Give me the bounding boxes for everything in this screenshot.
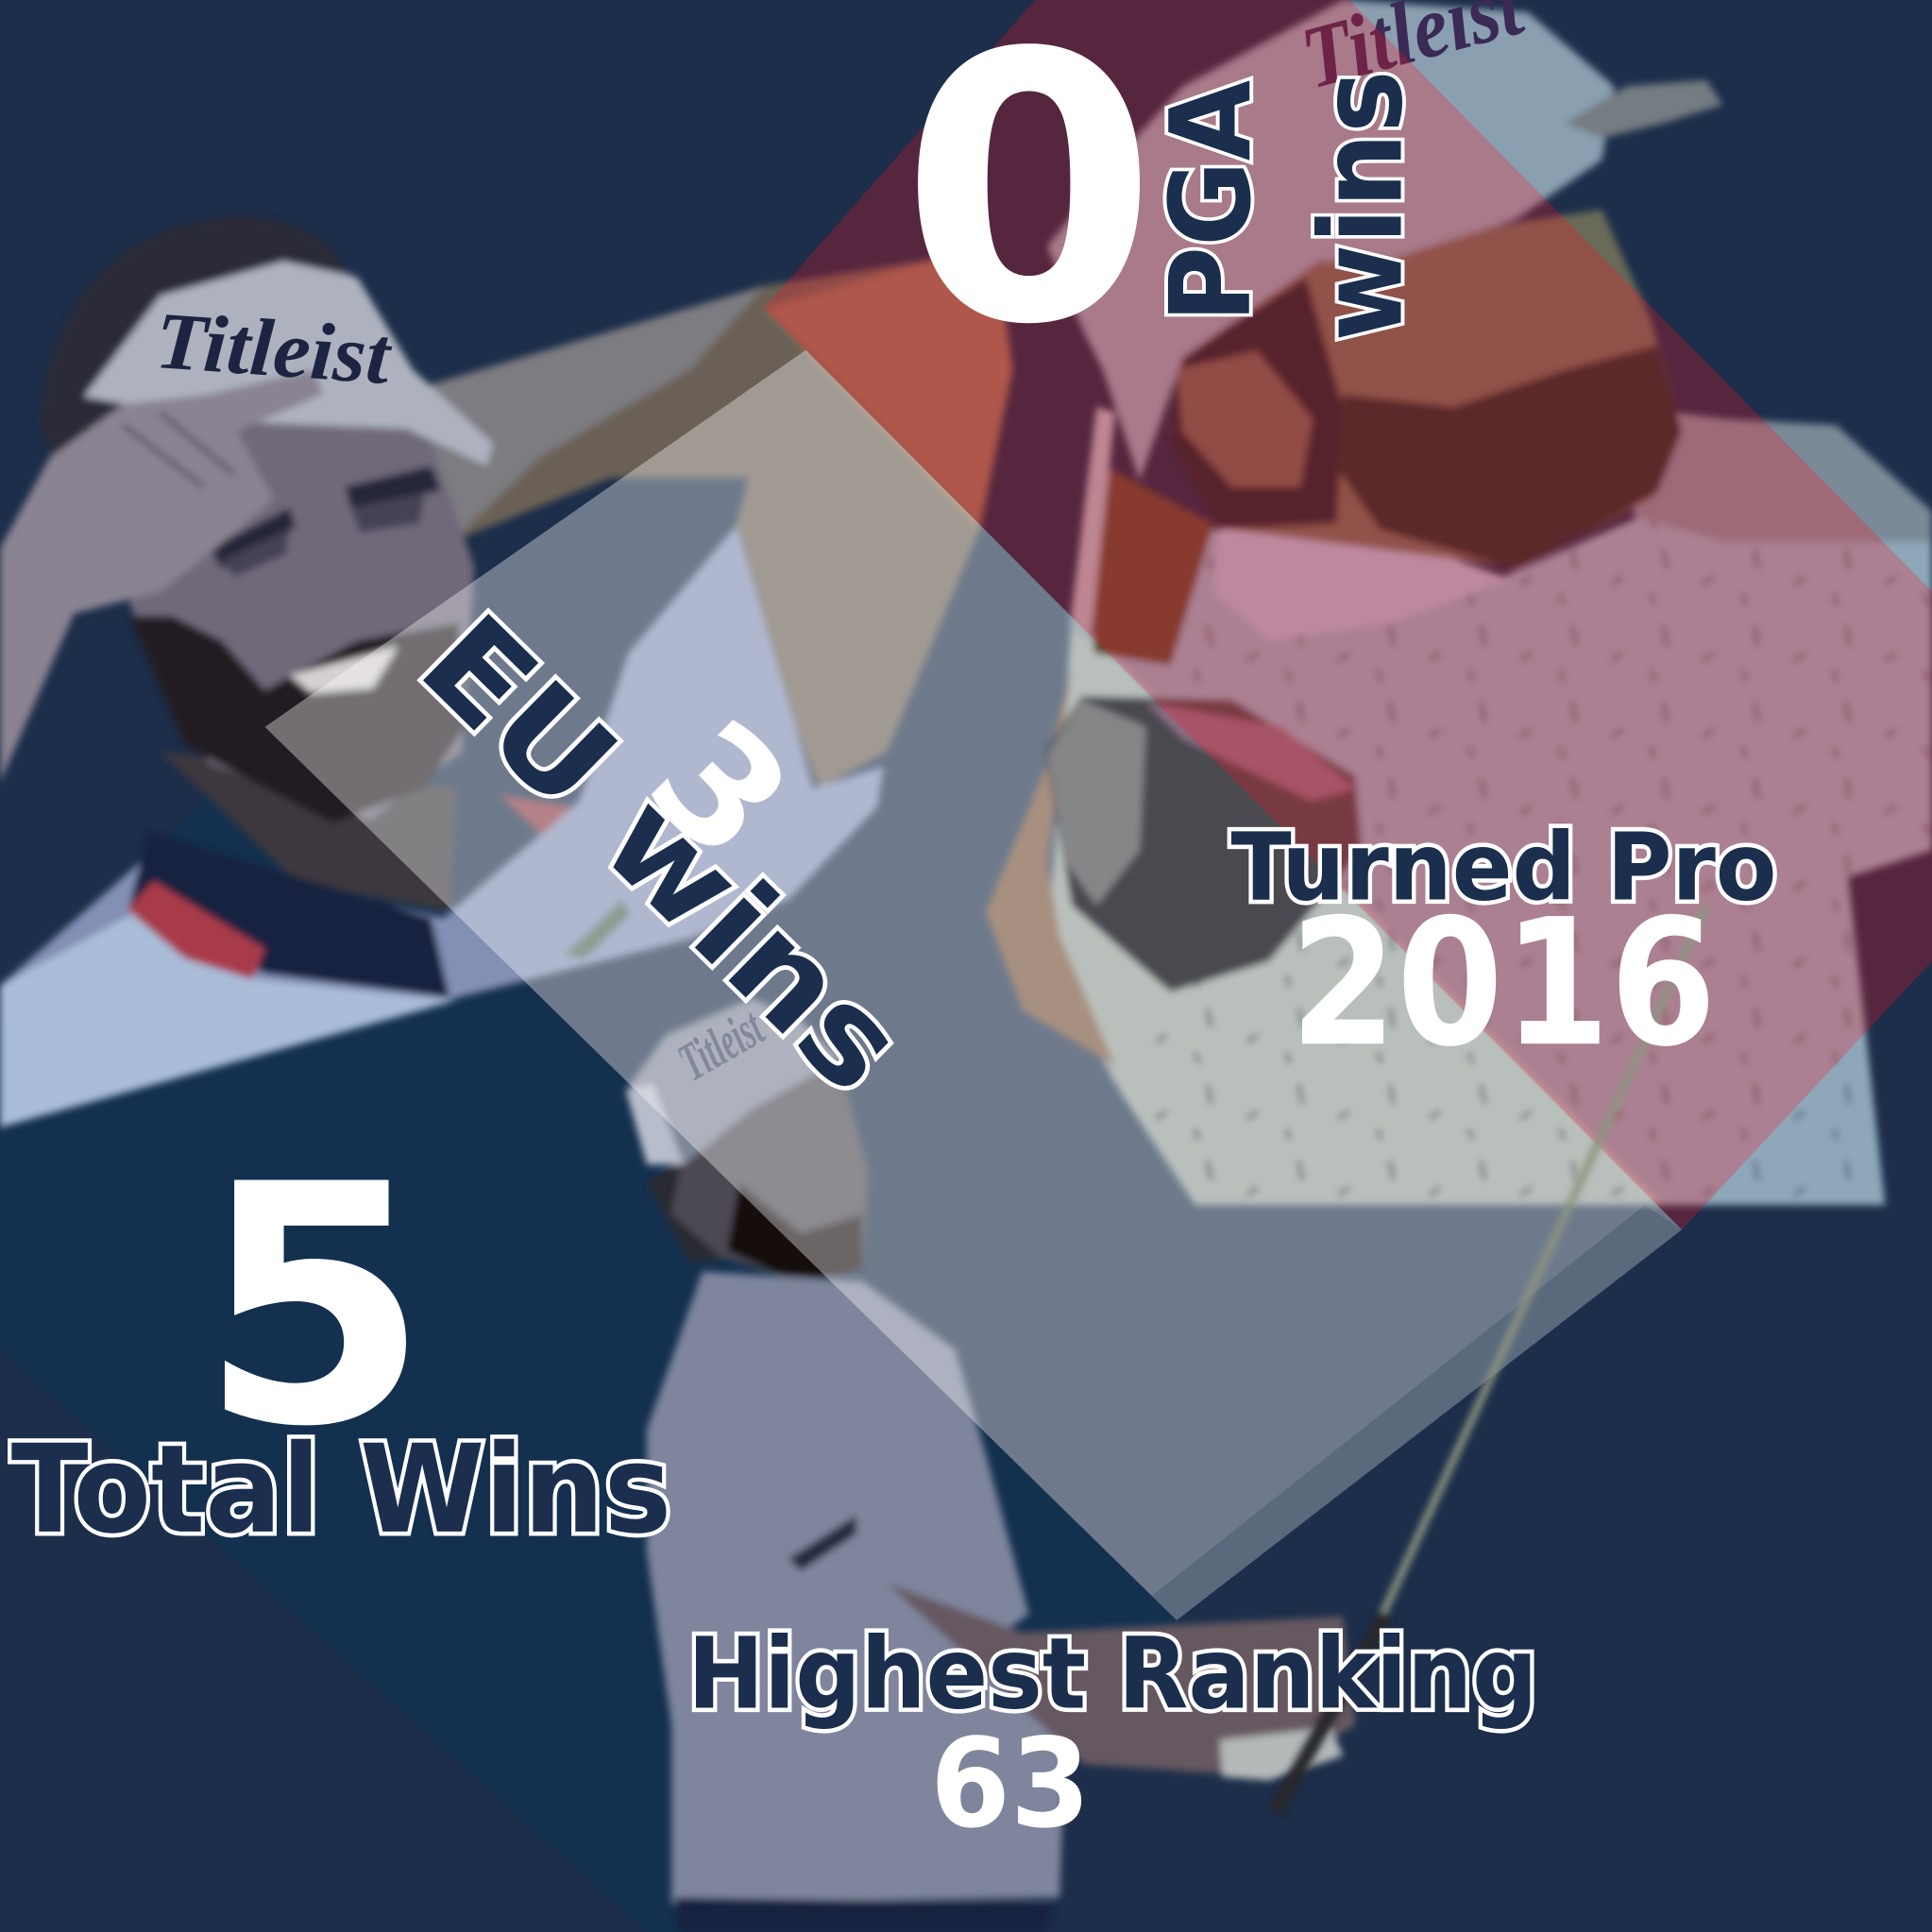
club head — [1045, 696, 1362, 991]
hand — [0, 369, 323, 783]
cap bill — [1565, 80, 1722, 138]
shirt chest stripe — [499, 795, 573, 836]
label wins: wins — [1297, 70, 1429, 341]
grey diamond overlay — [265, 350, 1682, 1620]
face — [671, 1059, 869, 1281]
shirt — [1047, 517, 1932, 1205]
eye sockets — [222, 493, 425, 577]
shirt collar — [1213, 524, 1509, 641]
cap — [626, 998, 840, 1164]
club head top — [1146, 703, 1355, 801]
raised arm — [419, 259, 1013, 788]
trousers — [675, 1897, 1054, 1932]
club shaft and grip — [1276, 906, 1706, 1811]
shirt — [0, 526, 884, 1127]
blue diagonal band — [0, 727, 1177, 1932]
smile — [290, 647, 397, 692]
hair — [647, 1146, 739, 1263]
elbow — [764, 259, 1013, 530]
arm — [887, 1584, 1355, 1777]
shirt lit lower left — [0, 906, 456, 1127]
polo shirt — [647, 1272, 1066, 1904]
visor — [84, 262, 493, 466]
face — [1171, 210, 1682, 567]
shirt print — [1115, 517, 1932, 1205]
stat: highest ranking — [687, 1617, 1537, 1856]
photo: golfer smiling, left — [0, 217, 1013, 1127]
face — [129, 419, 474, 820]
crocodile logo — [565, 900, 631, 958]
grey diamond bottom edge — [1152, 1205, 1682, 1620]
glove — [1220, 1727, 1343, 1781]
photo: golfer follow-through, right — [986, 0, 1932, 1205]
shirt below red edge — [1047, 616, 1662, 1205]
sleeve logo — [788, 1516, 856, 1571]
forearm upper tone — [419, 286, 764, 542]
neck — [161, 752, 456, 912]
hair — [1171, 278, 1343, 530]
cap side panel — [626, 1084, 684, 1164]
number 5: 5 — [199, 1114, 429, 1499]
white strap — [1070, 407, 1115, 641]
club head silver face — [1047, 700, 1146, 906]
label Total Wins: Total Wins — [11, 1419, 671, 1561]
year 2016: 2016 — [1290, 881, 1717, 1085]
beard — [129, 616, 466, 823]
stat: turned pro — [1231, 814, 1777, 1085]
stat: total wins — [11, 1114, 671, 1561]
stat: EU wins — [392, 587, 932, 1121]
label PGA: PGA — [1146, 80, 1276, 323]
cap — [1047, 0, 1614, 481]
neck shoulder — [1626, 407, 1932, 579]
eyes and brows — [210, 466, 441, 569]
label Highest Ranking: Highest Ranking — [687, 1617, 1537, 1732]
ear — [1177, 351, 1313, 486]
red diamond overlay — [764, 0, 1932, 1229]
finger creases — [123, 413, 234, 486]
forearm holding club — [986, 666, 1115, 1066]
photo: golfer full body, bottom — [626, 998, 1355, 1932]
visor logo: Titleist — [153, 295, 396, 401]
number 63: 63 — [930, 1712, 1091, 1856]
label Turned Pro: Turned Pro — [1231, 814, 1777, 923]
left forearm behind cap — [1091, 468, 1213, 666]
beard — [1337, 345, 1682, 569]
beard — [727, 1183, 862, 1284]
stat: PGA wins — [900, 0, 1429, 406]
number 3: 3 — [614, 686, 824, 895]
bottom cap logo: Titleist — [669, 997, 774, 1093]
hair — [40, 217, 351, 517]
collar — [129, 832, 449, 998]
label EU wins: EU wins — [392, 587, 932, 1121]
